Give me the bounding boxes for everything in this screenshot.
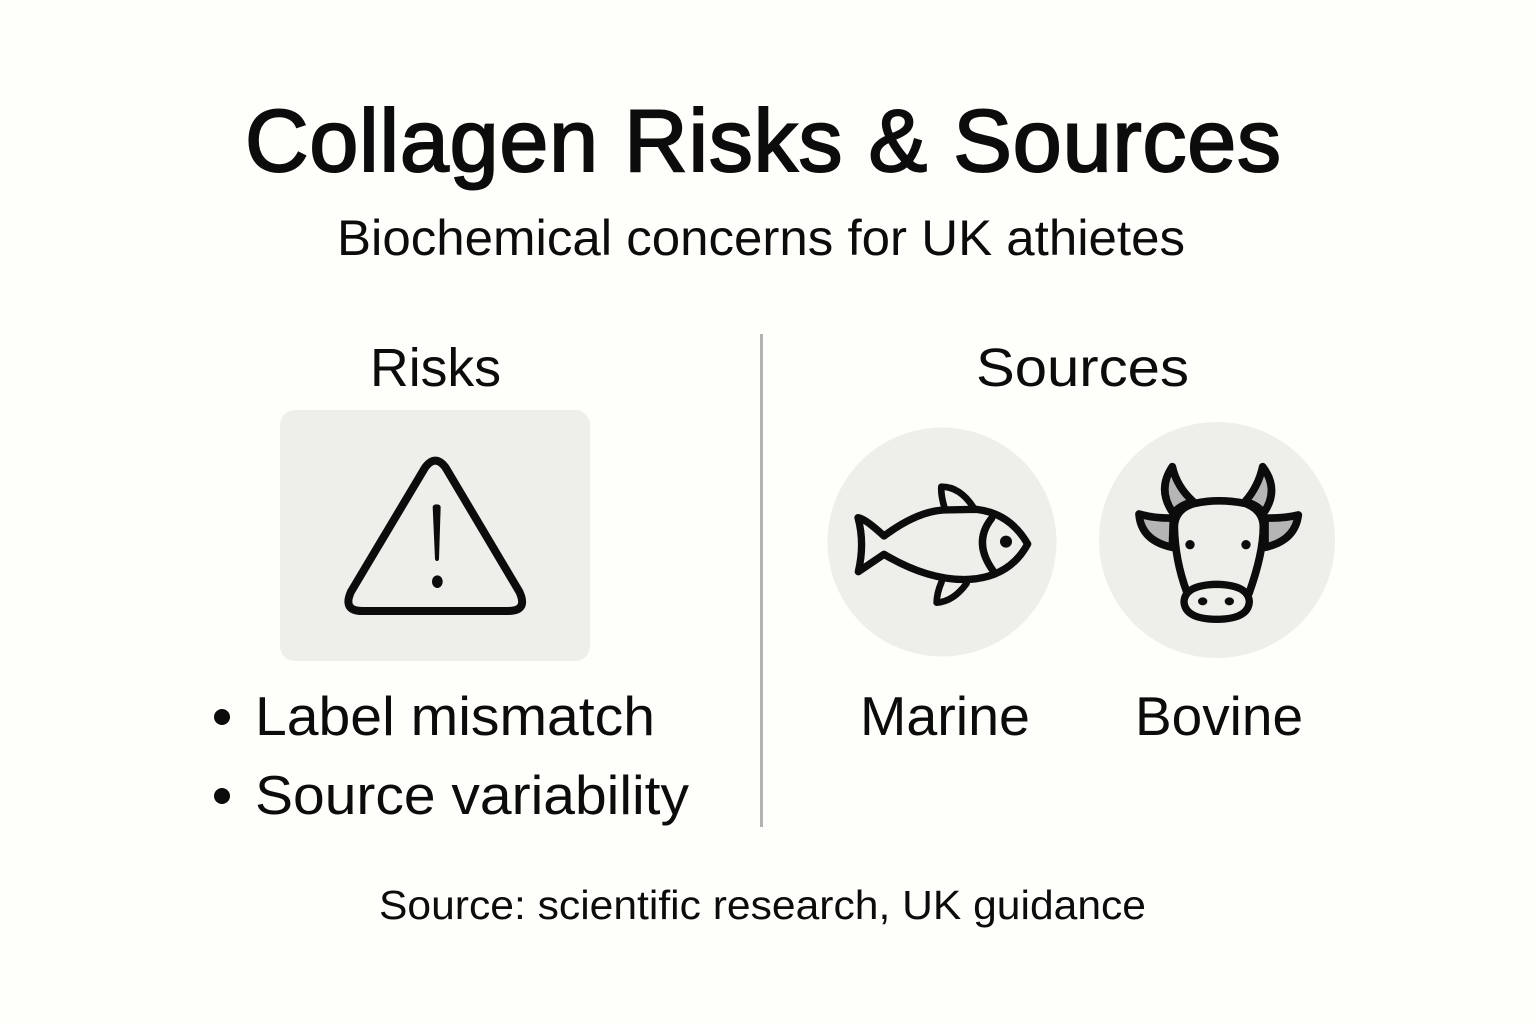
icon: cow head <box>1139 467 1298 619</box>
list item: label mismatch: Label mismatch <box>255 685 655 747</box>
title: Collagen Risks & Sources <box>245 91 1281 190</box>
list item: source variability: Source variability <box>255 764 690 826</box>
warning icon card <box>280 410 590 661</box>
source: bovine <box>1099 422 1335 747</box>
risk list <box>214 685 690 826</box>
heading: risks: Risks <box>370 338 501 398</box>
panel: risks <box>214 338 690 826</box>
icon: warning triangle <box>348 461 522 611</box>
heading: sources: Sources <box>976 338 1189 398</box>
footer source note: Source: scientific research, UK guidance <box>379 882 1146 928</box>
subtitle: Biochemical concerns for UK athietes <box>337 210 1185 266</box>
label: bovine: Bovine <box>1135 685 1303 747</box>
icon: fish <box>858 487 1028 603</box>
panel: sources <box>828 338 1335 747</box>
label: marine: Marine <box>860 685 1030 747</box>
source: marine <box>828 428 1056 747</box>
